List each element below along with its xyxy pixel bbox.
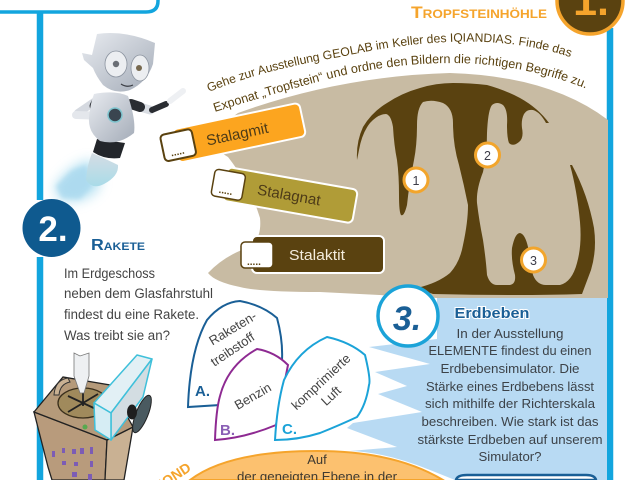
- heading: Erdbeben: Erdbeben: [454, 305, 530, 322]
- robot mascot: [54, 33, 183, 202]
- icon: robot tail: [86, 153, 118, 186]
- icon: robot torso: [89, 92, 134, 142]
- left frame line: [37, 13, 43, 480]
- answer A label: A.: [195, 383, 210, 400]
- answer petal A: [188, 301, 282, 407]
- heading: Tropfsteinhöhle: Tropfsteinhöhle: [411, 3, 547, 22]
- label: Stalaktit: [241, 236, 384, 273]
- answer B text: Benzin: [232, 380, 274, 413]
- answer B label: B.: [220, 422, 235, 439]
- launcher clamp: [54, 378, 70, 395]
- text block: orange ellipse: Auf: [307, 452, 327, 467]
- text block: Rakete question: Im Erdgeschoss: [64, 266, 155, 281]
- text block: Erdbeben question: beschreiben. Wie stark ist das: [422, 414, 599, 429]
- text block: Rakete question: neben dem Glasfahrstuhl: [64, 286, 213, 301]
- text block: Rakete question: findest du eine Rakete.: [64, 307, 199, 322]
- label: Stalaktit: .....: [247, 257, 261, 268]
- text block: Erdbeben question: Stärke eines Erdbebens lässt: [426, 379, 594, 394]
- label: Stalaktit: Stalaktit: [289, 247, 346, 264]
- label: Stalagnat: [210, 165, 358, 223]
- icon: robot mouth: [121, 84, 133, 86]
- number badge 2: 2.: [38, 210, 68, 249]
- icon: robot left eye: [105, 51, 127, 77]
- cave formations: stalactites, stalagnate, stalagmite: [357, 83, 595, 295]
- number badge 3: 3.: [393, 300, 421, 338]
- panel: orange ellipse: [190, 451, 443, 480]
- model box right face: [105, 427, 133, 480]
- text block: Rakete question: Was treibt sie an?: [64, 328, 170, 343]
- icon: rocket launcher model: [34, 353, 155, 480]
- text block: Rakete question: [64, 266, 213, 343]
- icon: robot right eye: [131, 55, 149, 81]
- text block: Erdbeben question: stärkste Erdbeben auf unserem: [418, 432, 602, 447]
- panel: cave backdrop: [200, 73, 608, 298]
- number badge 2: [22, 199, 80, 257]
- bottle rocket: [74, 353, 89, 393]
- text block: Erdbeben question: [418, 326, 602, 464]
- icon: robot head: [82, 33, 155, 92]
- badge 2: [476, 143, 500, 167]
- label: Stalagmit: .....: [170, 146, 186, 159]
- answer petal C: [275, 337, 370, 440]
- answer petal B: [215, 349, 288, 440]
- instruction text curved line 2: Exponat „Tropfstein“ und ordne den Bildern die richtigen Begriffe zu.: [213, 54, 586, 112]
- text block: Erdbeben question: sich mithilfe der Richterskala: [425, 396, 596, 411]
- badge 3: [522, 248, 546, 272]
- label: Stalagmit: Stalagmit: [205, 120, 271, 150]
- text block: Erdbeben question: Simulator?: [478, 449, 542, 464]
- launch platform: [58, 388, 108, 418]
- label: Stalagnat: Stalagnat: [256, 182, 323, 210]
- badge 1: [404, 168, 428, 192]
- answer C text: Luft: [318, 383, 344, 409]
- text block: Erdbeben question: Erdbebensimulator. Die: [440, 361, 580, 376]
- right frame line: [607, 28, 613, 480]
- icon: jet flame: [56, 165, 92, 199]
- answer A text: treibstoff: [208, 329, 258, 369]
- model box left face: [34, 412, 107, 480]
- panel: top-left box corner: [0, 0, 158, 12]
- badge 3: 3: [530, 254, 537, 268]
- number badge 3: [378, 286, 438, 346]
- model box top: [34, 377, 133, 440]
- green dot: [82, 424, 88, 430]
- handwheel knob: [127, 404, 137, 420]
- answer C text: komprimierte: [288, 351, 354, 413]
- handwheel: [129, 393, 155, 435]
- instruction text curved line 1: Gehe zur Ausstellung GEOLAB im Keller des IQIANDIAS. Finde das: [208, 33, 572, 91]
- label: Stalagnat: .....: [218, 185, 234, 198]
- badge 2: 2: [484, 149, 491, 163]
- answer A text: [206, 308, 259, 369]
- text block: Erdbeben question: ELEMENTE findest du einen: [428, 343, 592, 358]
- icon: robot arm right: [130, 91, 183, 110]
- badge 1: 1: [413, 174, 420, 188]
- text block: orange ellipse: [237, 452, 398, 480]
- heading: Rakete: Rakete: [91, 237, 145, 254]
- icon: jet glow: [54, 160, 100, 202]
- panel: Erdbeben background with jagged edge: [347, 298, 607, 480]
- answer C label: C.: [282, 421, 297, 438]
- answer box: [456, 475, 596, 480]
- icon: chest emblem: [108, 108, 122, 122]
- label: Stalagmit: [159, 103, 306, 166]
- answer A text: Raketen-: [206, 308, 259, 348]
- text block: Erdbeben question: In der Ausstellung: [456, 326, 564, 341]
- icon: robot waist: [93, 139, 125, 158]
- transparent launch chamber: [94, 355, 152, 440]
- number badge 1: [557, 0, 623, 34]
- icon: robot arm left: [76, 100, 108, 116]
- model ventilation marks: [52, 447, 93, 480]
